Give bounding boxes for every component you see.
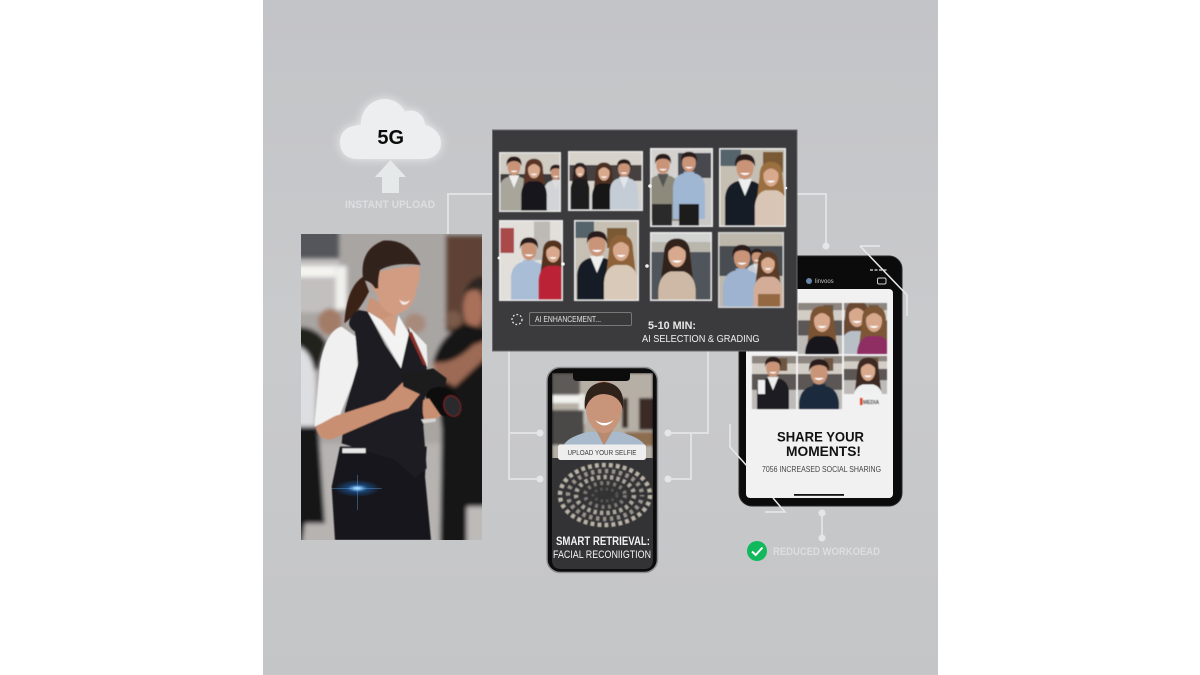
background panel — [263, 0, 938, 675]
reduced workload badge — [747, 541, 880, 561]
icon: 5G cloud upload — [340, 99, 441, 211]
panel caption: 5-10 MIN: — [648, 320, 696, 332]
photographer — [314, 240, 466, 540]
blurred event background — [295, 230, 495, 547]
tablet stat: 7056 INCREASED SOCIAL SHARING — [762, 465, 881, 474]
tablet photo grid — [752, 301, 891, 443]
badge label: REDUCED WORKOEAD — [773, 546, 880, 558]
panel caption: AI SELECTION & GRADING — [642, 333, 760, 345]
lens flare — [332, 475, 382, 510]
tablet screen — [746, 289, 893, 498]
phone — [547, 368, 658, 572]
panel: AI selection and grading — [492, 130, 797, 351]
panel caption — [642, 320, 760, 345]
phone notch — [573, 373, 630, 381]
tablet accent lines — [730, 246, 907, 512]
phone caption: SMART RETRIEVAL: — [556, 536, 650, 548]
connector lines — [448, 194, 830, 542]
AI enhancement status bar — [530, 312, 632, 326]
tablet photo grid: MEDIA — [863, 400, 880, 406]
panel background — [492, 130, 797, 351]
tablet status bar: linvoos — [815, 279, 834, 285]
face recognition spiral — [560, 465, 650, 525]
phone screen photo — [552, 373, 653, 458]
icon: green check — [747, 541, 767, 561]
tablet status bar — [806, 270, 888, 285]
AI enhancement status bar: AI ENHANCEMENT... — [535, 315, 601, 324]
cloud label: 5G — [377, 127, 404, 149]
tablet heading: SHARE YOUR — [777, 429, 864, 445]
upload caption: INSTANT UPLOAD — [345, 199, 435, 211]
phone caption: FACIAL RECONIIGTION — [553, 549, 651, 561]
selfie portrait — [563, 381, 646, 462]
upload arrow — [375, 160, 406, 193]
upload selfie button: UPLOAD YOUR SELFIE — [568, 448, 636, 457]
cloud shape — [340, 99, 441, 159]
upload selfie button — [558, 444, 646, 460]
photo: photographer with camera — [301, 234, 482, 540]
tablet body — [739, 256, 902, 506]
dark lower screen — [552, 458, 653, 569]
tablet home bar — [794, 494, 844, 496]
phone body — [547, 368, 658, 572]
photo grid — [499, 148, 787, 332]
progress spinner — [512, 314, 522, 324]
tablet — [739, 256, 902, 506]
phone caption — [553, 536, 651, 561]
grid sparkle points — [498, 184, 787, 268]
tablet: MOMENTS! — [786, 443, 861, 459]
